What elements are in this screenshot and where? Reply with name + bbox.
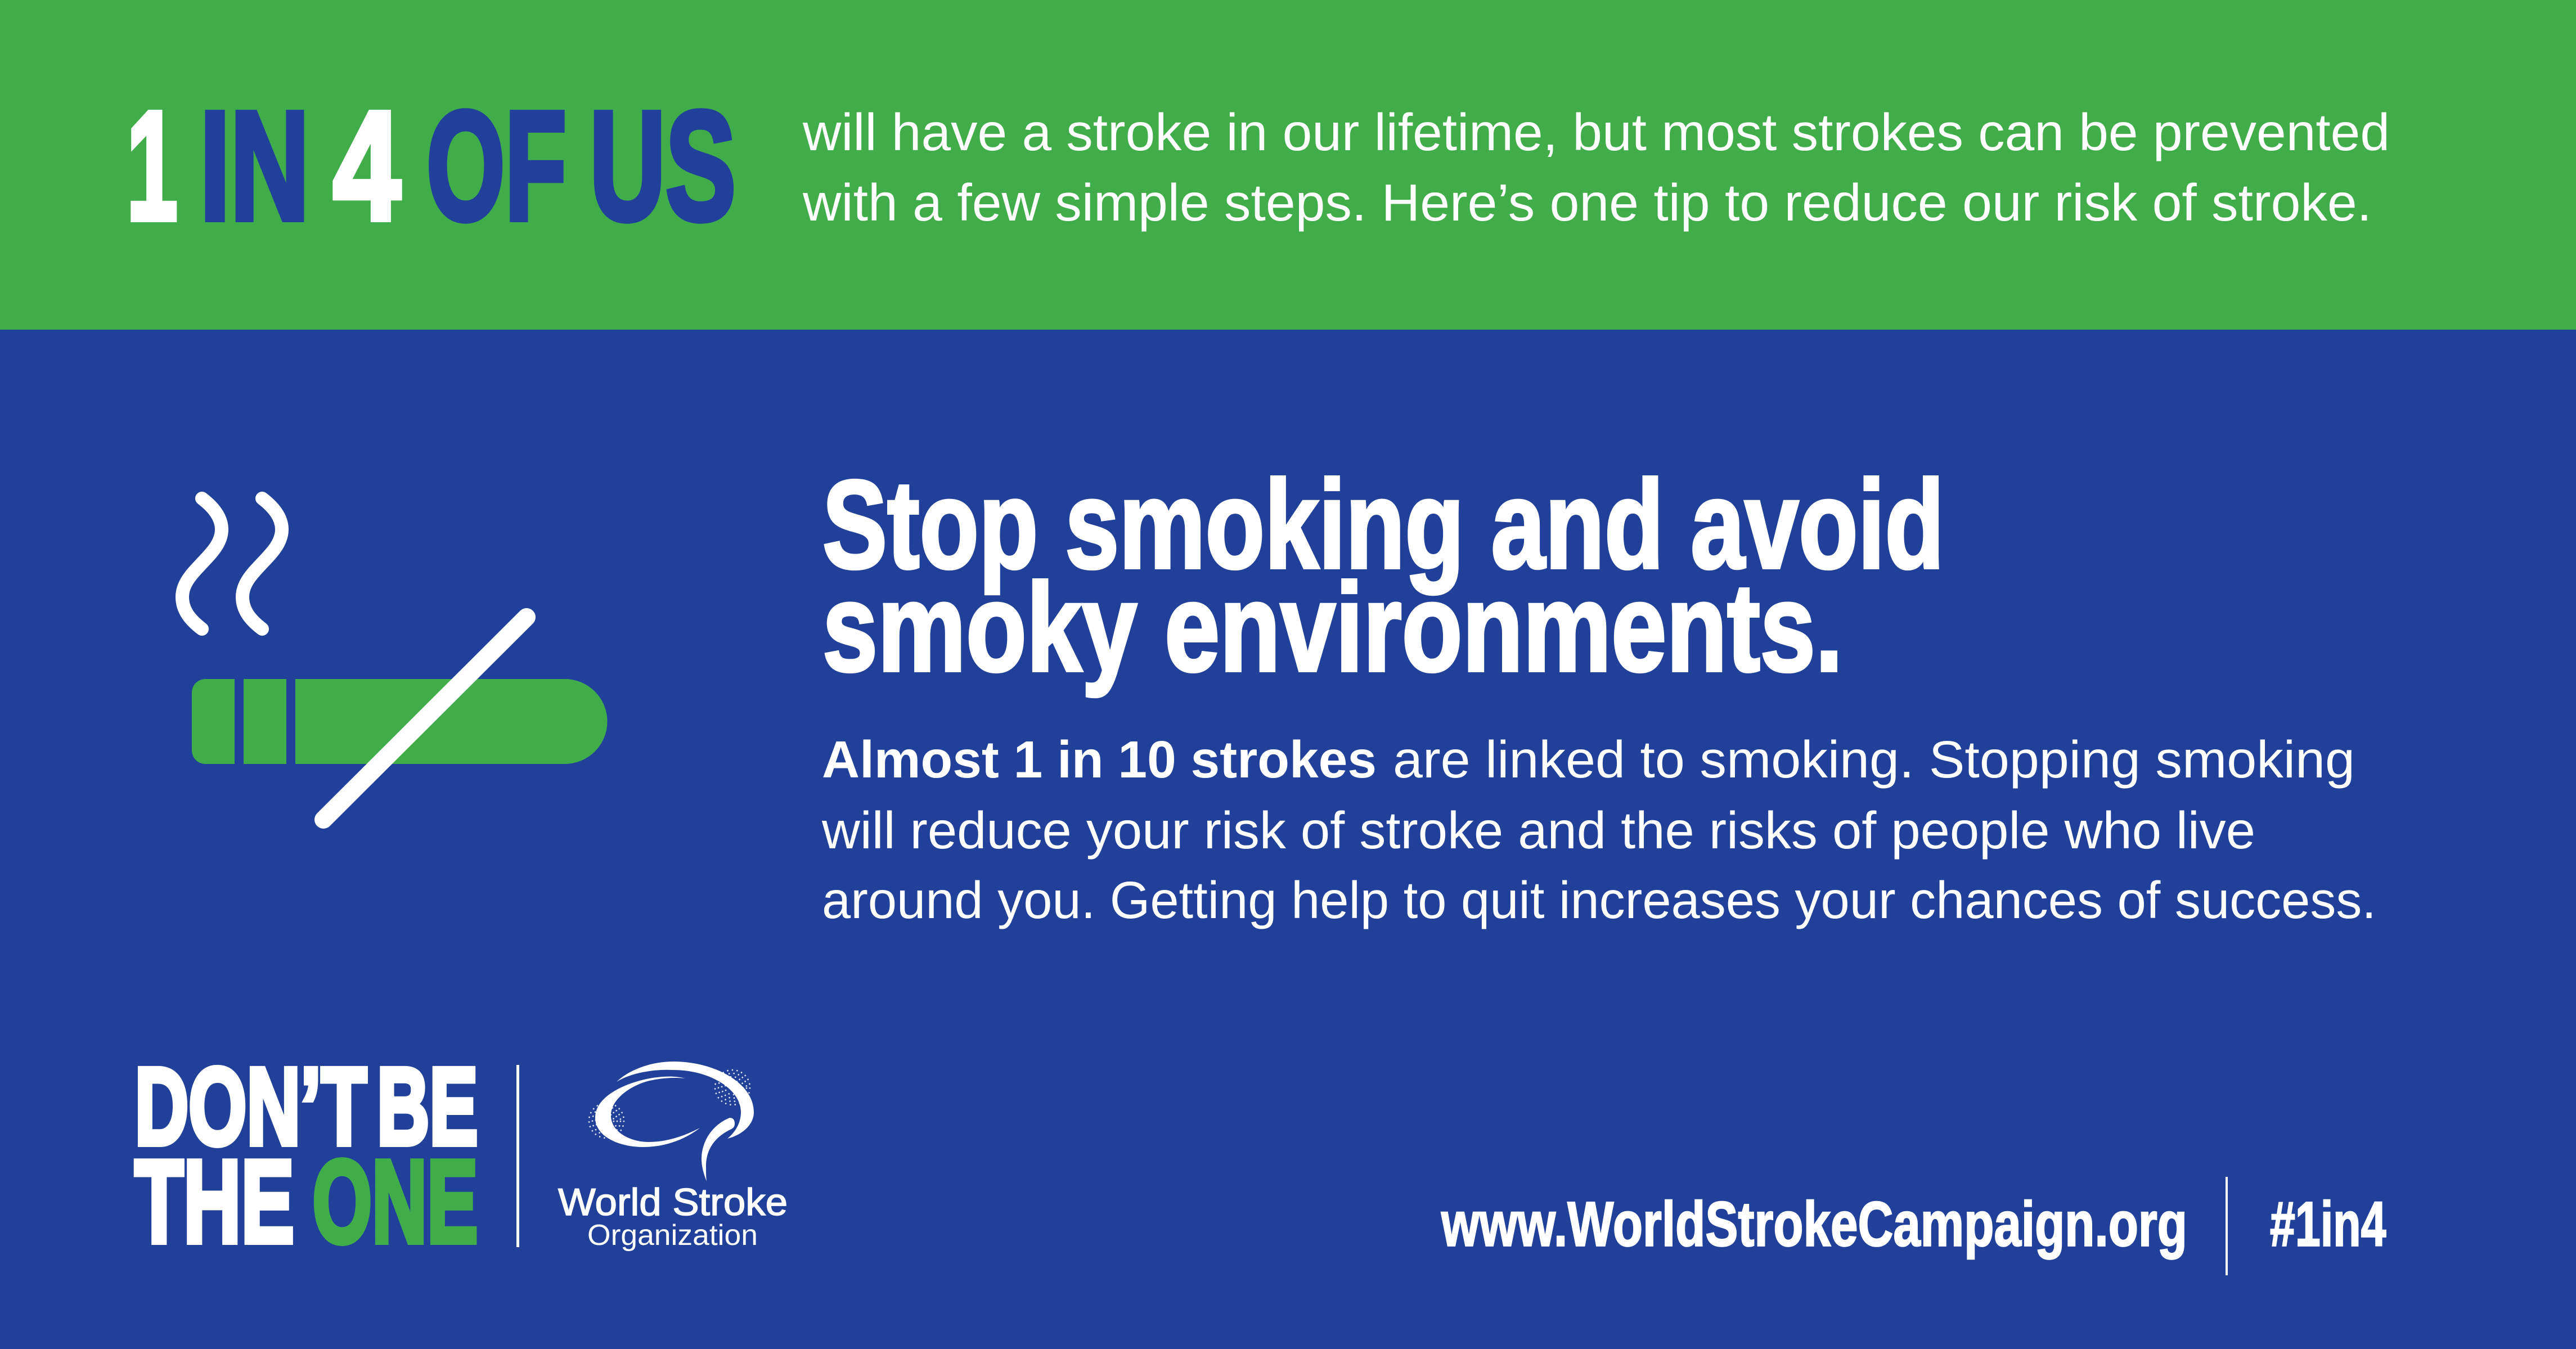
icon: strike-through line	[323, 617, 527, 820]
campaign logo: don't be the one: THE	[135, 1136, 294, 1267]
footer links	[1441, 1177, 2386, 1275]
header sentence	[802, 103, 2390, 232]
brain inner arc	[595, 1077, 700, 1147]
dotted ring	[592, 1107, 621, 1135]
dotted ring	[589, 1103, 624, 1138]
footer divider	[2226, 1177, 2228, 1275]
body line 3: around you. Getting help to quit increases your chances of success.	[822, 871, 2376, 929]
panel: green header band: US	[590, 79, 736, 253]
heading: stop smoking	[822, 455, 1944, 698]
logo text: organization: Organization	[587, 1219, 758, 1252]
cigarette band	[244, 679, 286, 764]
infographic canvas: DON’T	[135, 1045, 367, 1167]
header line 1: will have a stroke in our lifetime, but most strokes can be prevented	[802, 103, 2390, 161]
icon: no smoking cigarette	[182, 498, 608, 820]
infographic canvas: ONE	[312, 1136, 478, 1267]
logo: world stroke organization	[558, 1062, 788, 1252]
infographic canvas: BE	[377, 1045, 478, 1167]
dotted ring	[718, 1073, 747, 1101]
cigarette filter end	[192, 679, 235, 764]
header line 2: with a few simple steps. Here’s one tip to reduce our risk of stroke.	[802, 173, 2372, 232]
body bold lead-in: Almost 1 in 10 strokes	[822, 730, 1377, 789]
icon: cigarette body	[192, 679, 608, 764]
smoke wisp right	[242, 498, 282, 629]
dotted ring	[599, 1113, 614, 1128]
heading: 1 in 4 of us: 4	[333, 79, 401, 253]
divider between logos	[516, 1065, 519, 1247]
brain stem	[702, 1118, 735, 1181]
logo text: world stroke: World Stroke	[558, 1181, 788, 1224]
heading: 1 in 4 of us: 1	[127, 79, 178, 253]
cigarette main body	[295, 679, 608, 764]
panel: green header band	[0, 0, 2576, 330]
panel: green header band: OF	[426, 79, 567, 253]
heading: 1 in 4 of us: IN	[200, 79, 309, 253]
green band background	[0, 0, 2576, 330]
body line 2: will reduce your risk of stroke and the risks of people who live	[821, 801, 2255, 860]
campaign logo: don't be the one	[135, 1045, 478, 1267]
dotted ring	[722, 1077, 743, 1098]
brain dotted halo right	[715, 1070, 750, 1105]
body line 1: are linked to smoking. Stopping smoking	[1393, 730, 2355, 789]
smoke wisp left	[182, 498, 222, 629]
dotted ring	[715, 1070, 750, 1105]
dotted ring	[596, 1110, 617, 1131]
icon: smoke wisps	[182, 498, 282, 629]
brain outer arc	[617, 1062, 754, 1139]
dotted ring	[725, 1080, 740, 1095]
body text	[821, 730, 2376, 929]
brain dotted halo left	[589, 1103, 624, 1138]
logo: brain mark	[589, 1062, 754, 1181]
